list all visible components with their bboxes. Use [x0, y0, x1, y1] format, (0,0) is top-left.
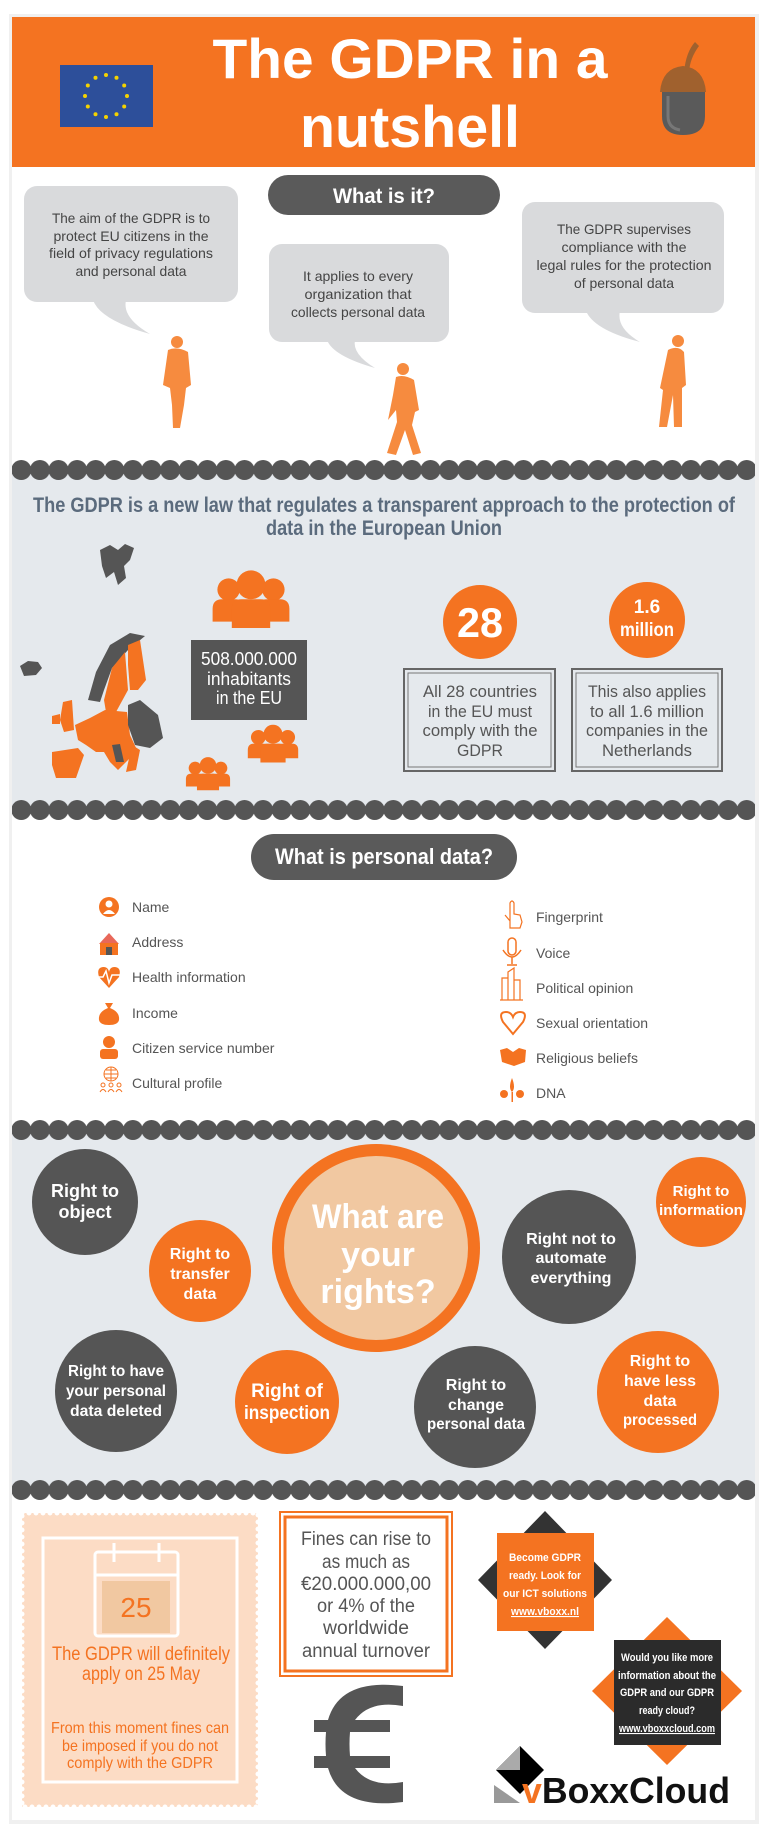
- circle: Right to have less data processed: have less: [624, 1373, 696, 1390]
- circle: Right to have less data processed: processed: [623, 1412, 697, 1429]
- callout: more information: Would you like more: [621, 1652, 713, 1664]
- box: 1.6 million companies: companies in the: [586, 721, 708, 740]
- item: Political opinion: Political opinion: [536, 980, 633, 996]
- stamp: GDPR date: apply on 25 May: [82, 1664, 200, 1685]
- item: Voice: [503, 938, 570, 965]
- stat circle 1.6 million: million: [620, 620, 674, 641]
- circle: Right to object: Right to: [51, 1181, 119, 1201]
- icon: calendar: [95, 1543, 178, 1636]
- circle: Right to object: object: [58, 1202, 112, 1222]
- heading: What is it?: What is it?: [333, 185, 435, 208]
- circle: Right to change personal data: Right to: [446, 1377, 506, 1394]
- callout: become GDPR ready: [478, 1511, 612, 1649]
- circle: Right to have your personal data deleted: [55, 1330, 177, 1452]
- section: EU facts: [12, 460, 755, 820]
- circle: Right to have less data processed: [597, 1331, 719, 1453]
- icon: euro sign: [314, 1685, 403, 1803]
- box: all 28 countries: GDPR: [457, 741, 503, 760]
- stat circle 1.6 million: 1.6: [634, 597, 660, 618]
- icon: people group large: [213, 570, 289, 628]
- box: 1.6 million companies: Netherlands: [602, 741, 692, 760]
- item: Income: Income: [132, 1005, 178, 1021]
- speech bubble 2: It applies to every: [303, 268, 413, 284]
- title: [212, 27, 608, 160]
- callout: more information: ready cloud?: [639, 1705, 695, 1717]
- box: fines: as much as: [322, 1552, 410, 1573]
- item: Name: [99, 897, 170, 917]
- circle: Right to transfer data: Right to: [170, 1246, 230, 1263]
- item: Religious beliefs: Religious beliefs: [536, 1050, 638, 1066]
- circle: Right not to automate everything: [502, 1190, 636, 1324]
- item: Health information: Health information: [132, 969, 246, 985]
- list: right column: [500, 901, 648, 1102]
- stat circle 1.6 million: [609, 582, 685, 658]
- box: fines: [280, 1512, 452, 1676]
- circle: Right to change personal data: personal data: [427, 1416, 525, 1433]
- icon: people group small 1: [248, 725, 298, 762]
- box: 1.6 million companies: This also applies: [588, 682, 706, 701]
- circle: Right not to automate everything: everything: [531, 1270, 611, 1287]
- circle: Right to object: [32, 1149, 138, 1255]
- circle: Right to information: information: [659, 1202, 743, 1219]
- circle: Right to change personal data: [414, 1346, 536, 1468]
- callout: become GDPR ready: Become GDPR: [509, 1552, 581, 1564]
- person 3: [659, 335, 686, 427]
- speech bubble 1: and personal data: [76, 263, 187, 279]
- circle: Right to transfer data: data: [184, 1286, 217, 1303]
- title: nutshell: [300, 95, 520, 160]
- item: DNA: [500, 1078, 566, 1102]
- item: Address: [99, 933, 183, 955]
- speech bubble 2: [269, 244, 449, 368]
- item: Income: [99, 1003, 178, 1025]
- item: Political opinion: [500, 968, 633, 1000]
- headline: [33, 494, 736, 540]
- logo: vBoxxCloud: vBoxxCloud: [522, 1770, 730, 1811]
- circle: Right of inspection: inspection: [244, 1403, 330, 1424]
- box: all 28 countries: All 28 countries: [423, 682, 537, 701]
- heading: What is it?: [268, 175, 500, 215]
- central circle: What are your rights?: What are: [312, 1198, 444, 1236]
- stat circle 28: 28: [457, 599, 503, 646]
- box: all 28 countries: [404, 669, 555, 771]
- item: Religious beliefs: [500, 1048, 638, 1066]
- person 2: [387, 363, 421, 455]
- circle: Right to have your personal data deleted: your personal: [66, 1383, 166, 1400]
- item: Health information: [95, 967, 246, 988]
- heading: What is personal data?: What is personal data?: [275, 844, 493, 869]
- inhabitants box: [191, 640, 307, 720]
- header banner: [12, 17, 755, 167]
- item: Address: Address: [132, 934, 183, 950]
- inhabitants box: 508.000.000: [201, 649, 297, 669]
- circle: Right to change personal data: change: [448, 1397, 504, 1414]
- box: all 28 countries: comply with the: [422, 721, 538, 740]
- item: Cultural profile: [100, 1067, 222, 1092]
- circle: Right not to automate everything: Right not to: [526, 1231, 616, 1248]
- speech bubble 3: of personal data: [574, 275, 674, 291]
- stamp: GDPR date: The GDPR will definitely: [52, 1644, 230, 1665]
- stamp: GDPR date: [22, 1513, 258, 1807]
- box: 1.6 million companies: [572, 669, 722, 771]
- item: Cultural profile: Cultural profile: [132, 1075, 222, 1091]
- item: Citizen service number: [100, 1036, 275, 1059]
- speech bubble 3: legal rules for the protection: [536, 257, 712, 273]
- circle: Right to information: Right to: [673, 1183, 729, 1200]
- item: Fingerprint: Fingerprint: [536, 909, 603, 925]
- box: fines: worldwide: [322, 1618, 409, 1639]
- speech bubble 3: The GDPR supervises: [557, 221, 691, 237]
- icon: people group small 2: [186, 757, 230, 790]
- callout: become GDPR ready: our ICT solutions: [503, 1588, 587, 1600]
- icon: calendar: 25: [120, 1592, 152, 1623]
- circle: Right of inspection: [235, 1350, 339, 1454]
- stamp: GDPR date: be imposed if you do not: [62, 1738, 218, 1755]
- item: DNA: DNA: [536, 1085, 566, 1101]
- stamp: GDPR date: From this moment fines can: [51, 1720, 229, 1737]
- speech bubble 1: field of privacy regulations: [49, 245, 213, 261]
- speech bubble 2: collects personal data: [291, 304, 425, 320]
- callout: more information: information about the: [618, 1670, 716, 1682]
- logo: vBoxxCloud: [494, 1746, 730, 1811]
- icon: acorn: [660, 42, 706, 135]
- item: Sexual orientation: Sexual orientation: [536, 1015, 648, 1031]
- inhabitants box: in the EU: [216, 688, 282, 708]
- item: Fingerprint: [505, 901, 603, 928]
- list: left column: [95, 897, 275, 1092]
- box: fines: annual turnover: [302, 1641, 431, 1662]
- stat circle 28: [443, 585, 517, 659]
- central circle: What are your rights?: [272, 1144, 480, 1352]
- box: all 28 countries: in the EU must: [428, 702, 532, 721]
- section: what is it: [24, 175, 724, 455]
- speech bubble 3: [522, 202, 724, 342]
- callout: more information: [592, 1617, 742, 1765]
- speech bubble 3: compliance with the: [562, 239, 687, 255]
- item: Name: Name: [132, 899, 170, 915]
- item: Voice: Voice: [536, 945, 570, 961]
- box: fines: Fines can rise to: [301, 1529, 431, 1550]
- section: dates, fines, contact: [22, 1511, 742, 1811]
- speech bubble 2: organization that: [304, 286, 412, 302]
- box: fines: €20.000.000,00: [301, 1574, 431, 1595]
- box: fines: or 4% of the: [317, 1596, 415, 1617]
- callout: become GDPR ready: ready. Look for: [509, 1570, 582, 1582]
- speech bubble 1: [24, 186, 238, 334]
- heading: What is personal data?: [251, 834, 517, 880]
- item: Sexual orientation: [501, 1012, 648, 1034]
- inhabitants box: inhabitants: [207, 669, 291, 689]
- speech bubble 1: The aim of the GDPR is to: [52, 210, 210, 226]
- item: Citizen service number: Citizen service number: [132, 1040, 275, 1056]
- stamp: GDPR date: comply with the GDPR: [67, 1755, 213, 1772]
- circle: Right to information: [656, 1157, 746, 1247]
- callout: more information: GDPR and our GDPR: [620, 1687, 714, 1699]
- title: The GDPR in a: [212, 27, 608, 90]
- box: 1.6 million companies: to all 1.6 million: [590, 702, 704, 721]
- circle: Right to have your personal data deleted: Right to have: [68, 1363, 164, 1380]
- person 1: [163, 336, 191, 428]
- map of Europe: [20, 544, 163, 778]
- section: personal data: [95, 834, 648, 1102]
- circle: Right to have less data processed: data: [644, 1393, 677, 1410]
- headline: data in the European Union: [266, 517, 502, 540]
- central circle: What are your rights?: your: [341, 1236, 415, 1274]
- circle: Right to transfer data: transfer: [170, 1266, 230, 1283]
- callout: become GDPR ready: www.vboxx.nl: [510, 1606, 579, 1618]
- circle: Right not to automate everything: automate: [535, 1250, 607, 1267]
- section: rights: [12, 1120, 755, 1500]
- circle: Right to have less data processed: Right to: [630, 1353, 690, 1370]
- circle: Right to transfer data: [149, 1220, 251, 1322]
- callout: more information: www.vboxxcloud.com: [618, 1723, 715, 1735]
- central circle: What are your rights?: rights?: [320, 1273, 436, 1311]
- circle: Right to have your personal data deleted: data deleted: [70, 1403, 162, 1420]
- speech bubble 1: protect EU citizens in the: [54, 228, 209, 244]
- icon: EU flag: [60, 65, 153, 127]
- circle: Right of inspection: Right of: [251, 1381, 324, 1402]
